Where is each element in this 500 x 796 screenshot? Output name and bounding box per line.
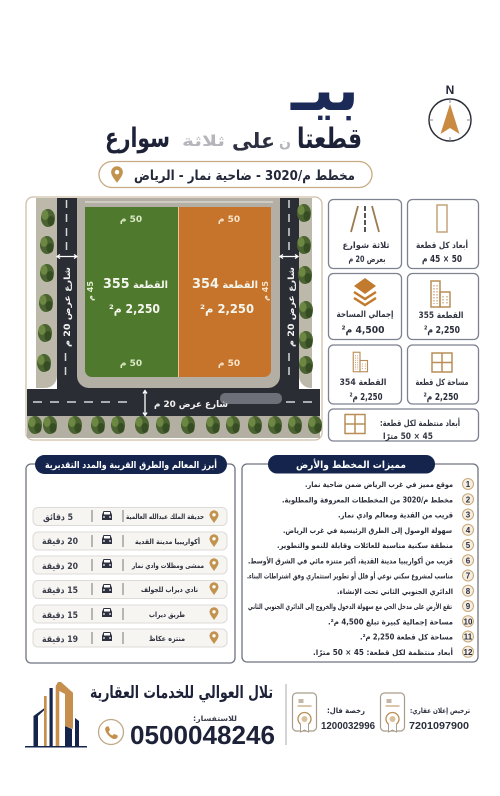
row: Aquarabia [33,532,227,550]
stat card: plot area [408,345,478,404]
title: ثلاثة [182,132,225,150]
inquiries label: للاستفسار: [193,714,237,723]
stat card: plot 354 [328,345,402,404]
row: Okaz park [33,629,227,647]
licence: FAL [292,693,375,732]
title: على [232,129,275,153]
plot 354: القطعة 354 [192,277,258,292]
row: Dirab road: طريق ديراب [149,611,185,619]
feature list: مساحة كل قطعة 2,250 م². [360,632,453,642]
compass: N [446,83,454,97]
licence: real estate advertising [380,693,470,732]
feature list: الدائري الجنوبي الثاني تحت الإنشاء. [337,587,453,596]
site plan map [26,197,322,440]
company name: تلال العوالي للخدمات العقارية [90,683,273,703]
row: Okaz park: 19 دقيقة [42,635,78,645]
feature list: مخطط م/3020 من المخططات المعروفة والمطلوبة. [282,495,453,504]
number badges: 12 [464,648,473,657]
feature list: منطقة سكنية مناسبة للعائلات وقابلة للنمو والتطوير. [277,541,453,550]
stat card: total area: إجمالي المساحة [336,310,394,320]
icon: phone [98,720,124,744]
plot 354: 45 م [261,281,270,301]
number badges [462,478,474,657]
title: قطعتا [297,122,362,155]
street labels: شارع عرض 20 م [154,400,228,410]
feature list: سهولة الوصول إلى الطرق الرئيسية في غرب الرياض. [283,526,452,535]
panel: plan features [242,455,478,662]
row: Dirab road: 15 دقيقة [42,611,78,621]
number badges: 10 [464,617,473,626]
title: بيـ [290,55,359,125]
stat card: total area: 4,500 م² [342,325,385,336]
row: King Abdullah park: حديقة الملك عبدالله العالمية [126,513,204,521]
row: Wadi Namar [33,556,227,574]
plot 355 [85,207,178,377]
plot 355: 50 م [120,359,142,369]
plot 355: 2,250 م² [109,302,160,317]
licence: FAL: رخصة فال: [327,706,365,715]
stat card: plot dimensions: أبعاد كل قطعة [416,239,468,251]
licence: real estate advertising: 7201097900 [409,721,469,732]
row: King Abdullah park: 5 دقائق [43,513,73,523]
title [105,55,362,155]
number badges: 11 [464,632,473,642]
plot 355: القطعة 355 [103,277,168,292]
panel: nearby landmarks [26,455,235,663]
street labels [57,254,298,416]
plot 355: 50 م [120,215,142,225]
row: King Abdullah park [33,508,227,526]
company logo [25,682,87,747]
stat card: plot dimensions [408,200,478,268]
feature list [247,480,453,657]
row: Aquarabia: أكواريبيا مدينة القدية [135,537,200,546]
stat card: three streets [328,200,402,268]
licence: FAL: 1200032996 [321,721,375,732]
trees [27,204,322,438]
title: ن [279,135,291,151]
plot 354: 50 م [218,215,240,225]
title: سوارع [105,123,170,154]
street labels: شارع عرض 20 م [63,267,73,347]
stat card: plot 354: 2,250 م² [350,392,383,403]
divider [285,684,287,745]
number badges: 5 [466,541,471,550]
number badges: 3 [466,510,471,520]
stat card: plot area: 2,250 م² [424,392,459,403]
stat card: regular dimensions [328,409,478,442]
row: Aquarabia: 20 دقيقة [42,537,78,547]
row: Dirab golf club: نادي ديراب للجولف [141,586,198,594]
location pill [99,162,372,188]
stat card: total area [328,274,402,340]
row: Dirab golf club: 15 دقيقة [42,586,78,596]
location pill: مخطط م/3020 - ضاحية نمار - الرياض [134,168,355,184]
row: Wadi Namar: 20 دقيقة [42,562,78,572]
licence: real estate advertising: ترخيص إعلان عقاري: [410,707,470,715]
number badges: 4 [466,526,471,535]
row: Wadi Namar: ممشى ومظلات وادي نمار [131,562,204,570]
feature list: أبعاد منتظمة لكل قطعة: 45 × 50 مترًا. [313,647,453,657]
feature list: موقع مميز في غرب الرياض ضمن ضاحية نمار. [305,480,453,489]
phone number: 0500048246 [130,720,275,750]
number badges: 7 [466,572,471,580]
row: Okaz park: منتزه عكاظ [149,635,185,643]
number badges: 6 [466,556,471,565]
roads [27,198,320,416]
plot 354: 50 م [218,359,240,369]
compass [429,83,471,141]
landmarks heading: أبرز المعالم والطرق القريبة والمدد التقديرية [45,458,217,471]
row: Dirab golf club [33,580,227,598]
stat card: plot 355 [408,274,478,340]
stat card: plot 354: القطعة 354 [340,378,387,388]
stat card: plot dimensions: 50 × 45 م [422,254,462,265]
stat card: plot area: مساحة كل قطعة [416,378,468,388]
row: Dirab road [33,605,227,623]
stat card: three streets: ثلاثة شوارع [342,241,390,251]
feature list: مساحة إجمالية كبيرة تبلغ 4,500 م². [328,617,453,626]
number badges: 9 [466,602,471,611]
number badges: 2 [466,495,471,504]
features heading: مميزات المخطط والأرض [296,458,406,471]
stat card: three streets: بعرض 20 م [348,255,386,265]
feature list: قريب من أكواريبيا مدينة القدية، أكبر متنزه مائي في الشرق الأوسط. [248,555,453,565]
features heading [268,455,435,474]
feature list: قريب من القدية ومعالم وادي نمار. [338,510,453,520]
number badges: 1 [466,480,471,489]
plot 354: 2,250 م² [200,302,254,317]
landmarks heading [35,455,227,474]
sidewalk [77,198,280,388]
plot 354 [178,207,271,377]
number badges: 8 [466,587,471,596]
street labels: شارع عرض 20 م [287,267,297,347]
plot 355: 45 م [86,281,95,301]
stat card: plot 355: 2,250 م² [424,325,460,336]
stat card: regular dimensions: 45 × 50 مترًا [383,432,433,442]
stat card: plot 355: القطعة 355 [418,311,464,321]
stat card: regular dimensions: أبعاد منتظمة لكل قطعة: [380,417,460,429]
